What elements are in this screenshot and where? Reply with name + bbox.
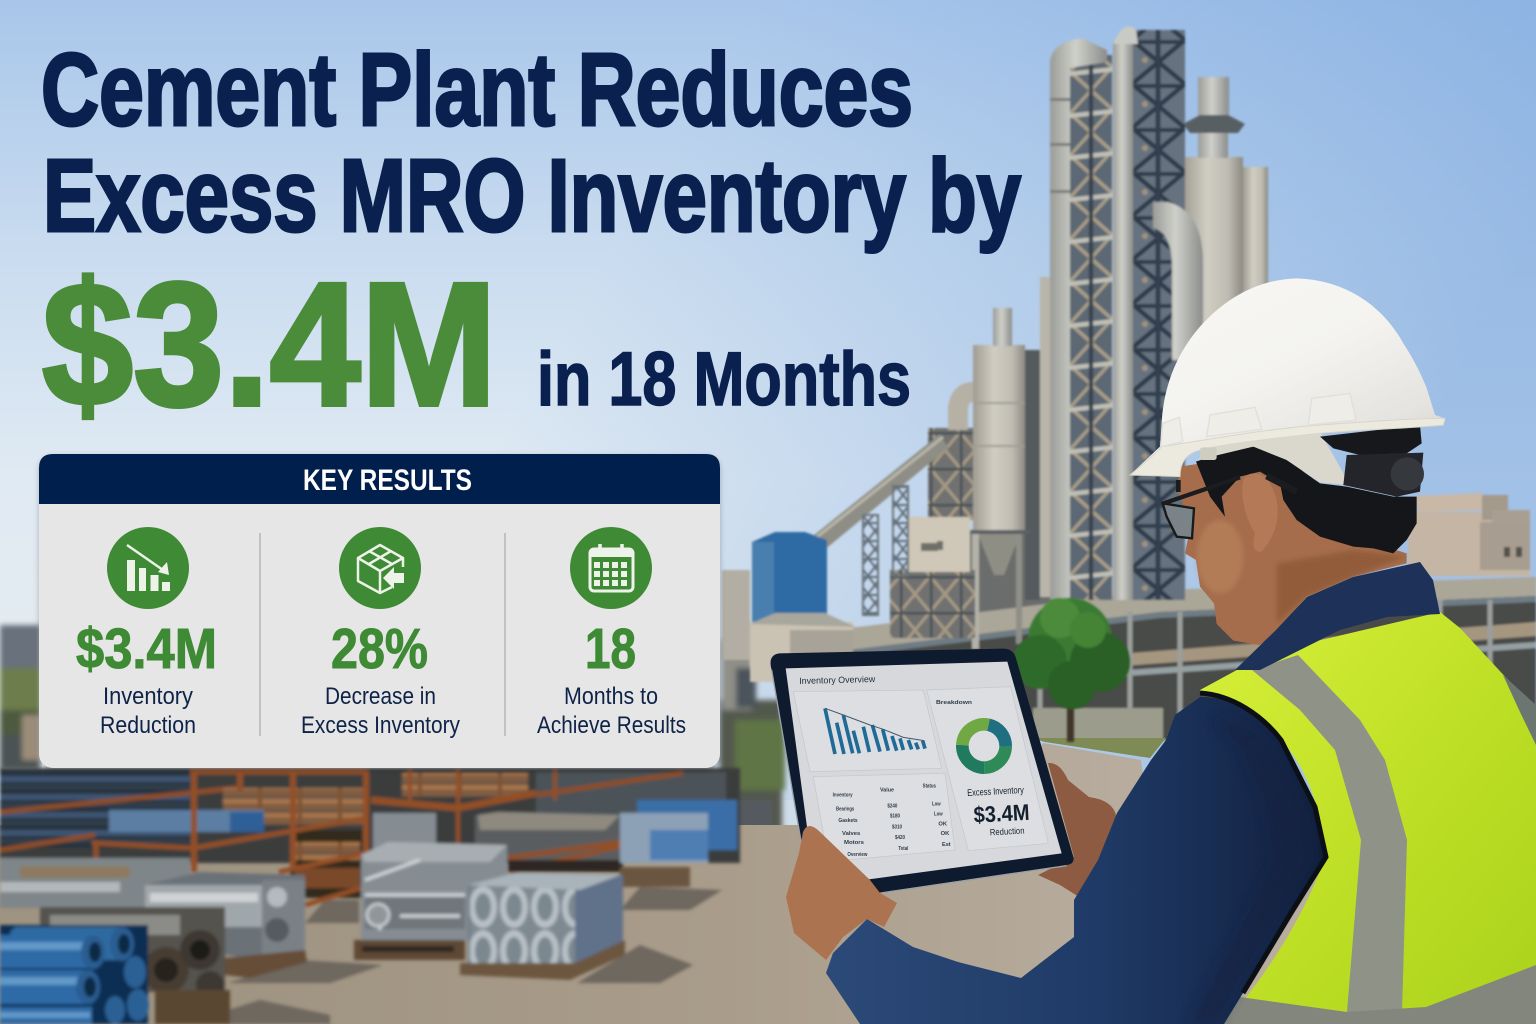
tablet — [771, 649, 1074, 903]
worker: neck shadow — [1277, 550, 1407, 623]
tablet: table rows: Bearings — [836, 807, 854, 813]
tablet: donut chart — [958, 720, 1010, 772]
tablet: excess inventory callout: Reduction — [990, 826, 1025, 837]
metric label: Achieve Results — [537, 712, 686, 739]
blue pipes — [0, 925, 149, 1024]
metric label — [100, 683, 196, 739]
panel heading: KEY RESULTS — [303, 464, 472, 497]
metric label: Decrease in — [325, 683, 436, 710]
vest: lower reflective band — [1222, 965, 1536, 1024]
worker: face highlight — [1197, 520, 1243, 593]
tablet: title: Inventory Overview — [799, 674, 876, 686]
wrapped bundle 2 — [460, 873, 625, 980]
far-left silver pile — [0, 858, 190, 908]
metric label — [537, 683, 686, 739]
tablet: table rows: Inventory — [833, 793, 853, 799]
tablet: table rows: $180 — [890, 814, 900, 820]
tree — [1013, 598, 1130, 742]
metric label: Reduction — [100, 712, 196, 739]
rear area behind racks — [0, 768, 740, 863]
rack right — [371, 770, 555, 851]
tablet: table rows: Overview — [847, 852, 868, 858]
tablet: screen — [786, 662, 1062, 887]
worker: head — [1130, 278, 1445, 645]
worker holding tablet — [826, 278, 1536, 1024]
rack row far — [0, 770, 726, 850]
panel header — [39, 454, 720, 504]
tablet: body — [771, 649, 1074, 903]
tablet: excess inventory callout: Excess Inventory — [967, 785, 1024, 799]
vest: body — [1200, 612, 1536, 1024]
tablet: table rows: $420 — [895, 835, 905, 841]
storage yard: racks and wrapped pipe bundles — [0, 768, 740, 1024]
tablet: table rows: Low — [932, 801, 941, 807]
rack middle — [92, 770, 366, 905]
worker: hard hat ribs — [1161, 393, 1356, 447]
metric label: Excess Inventory — [301, 712, 461, 739]
title line 2: Excess MRO Inventory by — [43, 138, 1021, 253]
tablet: table rows: Est — [942, 842, 951, 848]
metric: decrease in excess inventory — [301, 527, 461, 739]
worker: hair — [1196, 447, 1417, 553]
ground — [0, 738, 1536, 1024]
metric label — [301, 683, 461, 739]
tablet: table rows: $240 — [887, 804, 897, 810]
plant: left silo — [960, 308, 1030, 649]
tablet: excess inventory callout: $3.4M — [973, 799, 1030, 828]
metric value: 18 — [585, 617, 636, 681]
worker: rear suspension — [1320, 425, 1424, 497]
steel bundle with orange rack — [475, 812, 625, 872]
background: distant buildings and trees at left horizon — [0, 625, 40, 770]
tablet: panel outlines — [793, 687, 1048, 862]
blue stacks right — [620, 800, 737, 887]
metric value: 28% — [331, 617, 428, 681]
plant: right beige building — [1408, 493, 1530, 576]
worker: hard hat brim — [1130, 418, 1445, 477]
worker: glasses — [1162, 476, 1297, 538]
plant: right silos — [1183, 77, 1268, 357]
worker: hard hat shell — [1130, 278, 1445, 477]
tablet: table rows — [833, 700, 973, 858]
icon: box — [339, 527, 421, 609]
yard shadows — [184, 887, 722, 1024]
plant: low buildings — [722, 570, 856, 682]
worker: vest — [1200, 612, 1536, 1024]
dividers — [260, 533, 505, 736]
metric label: Inventory — [103, 683, 194, 710]
plant: curved duct — [1153, 202, 1203, 360]
plant: blue building — [752, 532, 827, 625]
tablet: table rows: $310 — [892, 825, 902, 831]
vest: reflective stripe — [1252, 655, 1407, 1012]
tablet: silver edge — [772, 670, 1067, 903]
worker: ear — [1242, 473, 1278, 552]
tablet: bar chart — [825, 708, 925, 754]
tablet: table rows: OK — [938, 821, 948, 827]
worker: back hand — [1038, 763, 1116, 897]
panel: key results — [39, 454, 720, 768]
metric value: $3.4M — [76, 617, 217, 681]
sky background — [0, 0, 1536, 800]
plant: left lattice, conveyor and towers — [793, 392, 975, 638]
plant: main steel tower — [1025, 26, 1185, 600]
tablet: table rows: Motors — [844, 840, 864, 846]
tablet: excess inventory callout — [967, 785, 1030, 837]
worker: armhole piping — [1200, 693, 1326, 993]
worker: sleeve — [826, 697, 1325, 1024]
metric: inventory reduction — [76, 527, 217, 739]
cement plant — [722, 26, 1536, 740]
metric label: Months to — [564, 683, 658, 710]
headline figure: $3.4M — [42, 247, 497, 443]
background: buildings and foliage beside tablet — [720, 640, 785, 850]
panel background — [39, 454, 720, 768]
worker: front hand — [786, 826, 897, 960]
vest: side stripe — [1503, 675, 1536, 745]
worker: sleeve shading — [1190, 720, 1312, 1024]
tablet: table rows: Total — [898, 846, 909, 852]
title line 1: Cement Plant Reduces — [41, 32, 913, 147]
tablet: table rows: Gaskets — [838, 818, 858, 824]
plant: lower gallery and structure — [850, 530, 1536, 740]
metric: months to achieve results — [537, 527, 686, 739]
icon: chart trending down — [107, 527, 189, 609]
tablet: table rows: Status — [923, 784, 936, 790]
worker: face and neck — [1177, 450, 1407, 645]
tablet: table rows: Valves — [842, 831, 860, 837]
wrapped bundle 3 — [145, 872, 307, 978]
worker: hard hat clip — [1200, 447, 1217, 460]
main title — [41, 32, 1021, 253]
tablet: table rows: Value — [880, 788, 894, 794]
icon: calendar — [570, 527, 652, 609]
tablet: table rows: Low — [934, 811, 943, 817]
worker: collar — [1235, 562, 1440, 670]
tablet: table rows: Breakdown — [936, 700, 973, 706]
dark pipe pile — [40, 907, 230, 1024]
wrapped bundle 1 — [354, 842, 507, 960]
tablet: table rows: OK — [941, 831, 950, 837]
worker: harness band — [1197, 432, 1350, 485]
headline suffix: in 18 Months — [537, 337, 911, 422]
